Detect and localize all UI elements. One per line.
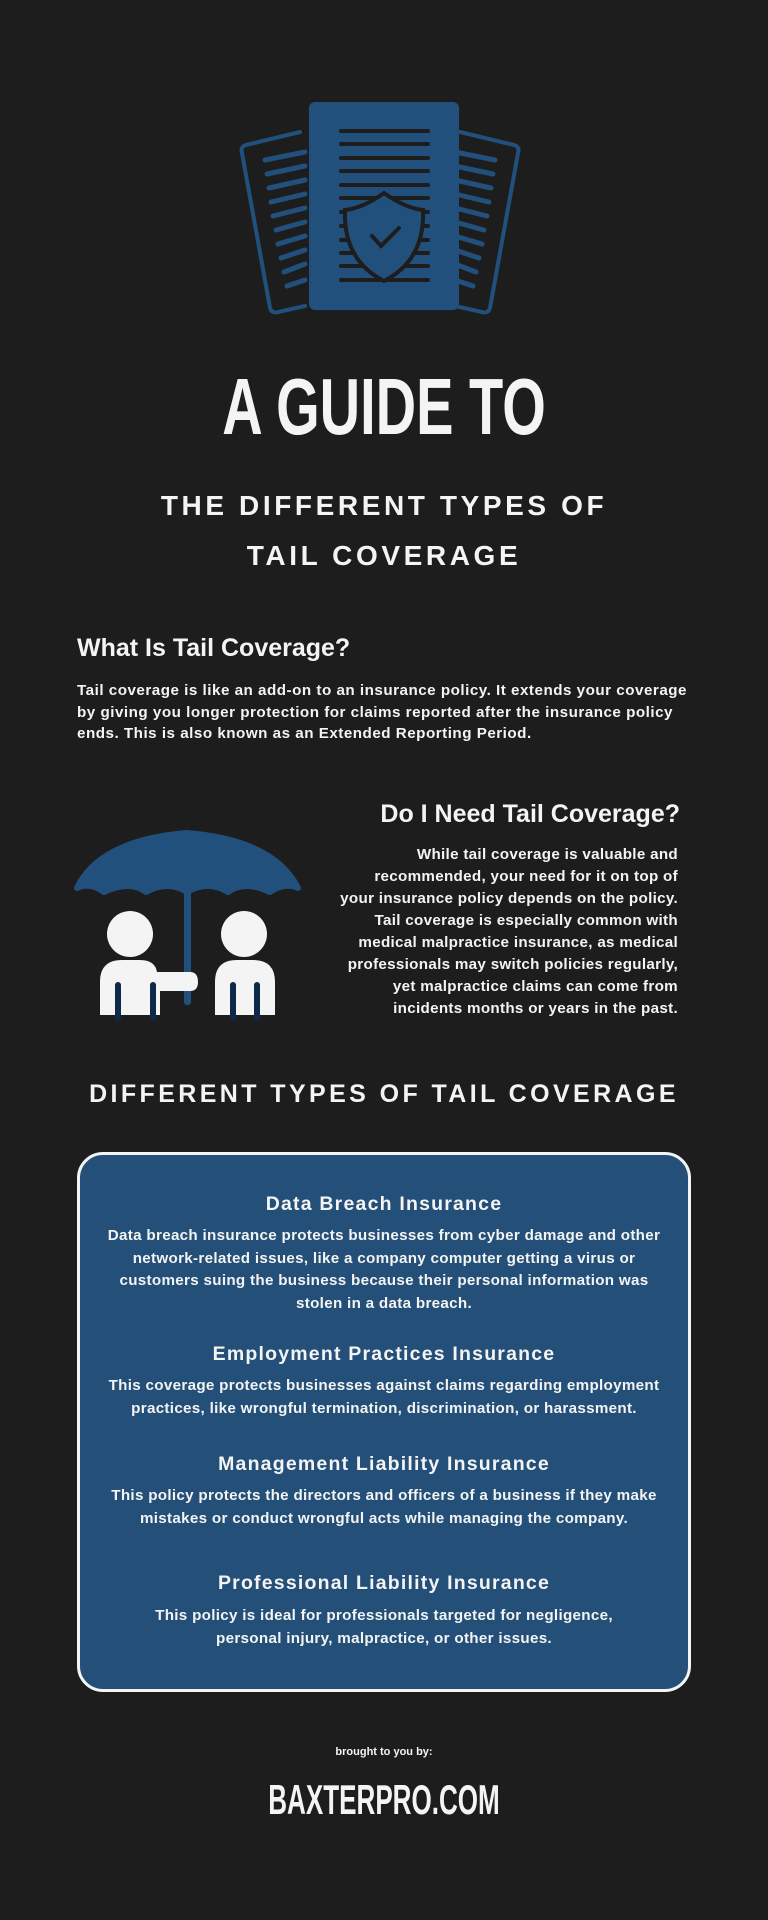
text: what is tail coverage: Tail coverage is like an add-on to an insurance policy. It extends your coverage by giving you longer protection for claims reported after the insurance policy ends. This is also known as an Extended Reporting Period.: [77, 682, 687, 742]
icon: umbrella with people: [74, 830, 301, 1021]
text: do I need tail coverage: Tail coverage is especially common with: [375, 912, 678, 929]
heading: employment practices: Employment Practices Insurance: [213, 1343, 555, 1365]
title: A GUIDE TO: [222, 362, 546, 451]
brand: BAXTERPRO.COM: [268, 1776, 500, 1823]
heading: management liability: Management Liability Insurance: [218, 1453, 550, 1475]
text: do I need tail coverage: professionals may switch policies regularly,: [348, 956, 678, 973]
text: do I need tail coverage: recommended, your need for it on top of: [374, 868, 678, 885]
heading: different types: DIFFERENT TYPES OF TAIL COVERAGE: [89, 1080, 679, 1108]
subtitle: [161, 490, 607, 571]
text: do I need tail coverage: incidents months or years in the past.: [393, 1000, 678, 1017]
subtitle: TAIL COVERAGE: [247, 540, 521, 571]
heading: do I need tail coverage: Do I Need Tail Coverage?: [380, 800, 680, 828]
subtitle: THE DIFFERENT TYPES OF: [161, 490, 607, 521]
text: do I need tail coverage: [340, 846, 678, 1017]
text: professional liability: This policy is ideal for professionals targeted for negligence, personal injury, malpractice, or other issues.: [155, 1607, 613, 1646]
text: data breach: Data breach insurance protects businesses from cyber damage and other network-related issues, like a company computer getting a virus or customers suing the business because their personal information was stolen in a data breach.: [108, 1227, 660, 1312]
heading: data breach: Data Breach Insurance: [266, 1193, 502, 1215]
credit label: brought to you by:: [335, 1746, 433, 1758]
text: do I need tail coverage: yet malpractice claims can come from: [393, 978, 678, 995]
icon: insurance documents with shield: [240, 102, 520, 314]
text: do I need tail coverage: your insurance policy depends on the policy.: [340, 890, 678, 907]
panel: types of tail coverage: [77, 1152, 691, 1692]
text: do I need tail coverage: medical malpractice insurance, as medical: [358, 934, 678, 951]
text: employment practices: This coverage protects businesses against claims regarding employment practices, like wrongful termination, discrimination, or harassment.: [109, 1377, 659, 1416]
heading: what is tail coverage: What Is Tail Coverage?: [77, 634, 350, 662]
text: do I need tail coverage: While tail coverage is valuable and: [417, 846, 678, 863]
text: management liability: This policy protects the directors and officers of a business if they make mistakes or conduct wrongful acts while managing the company.: [111, 1487, 657, 1526]
heading: professional liability: Professional Liability Insurance: [218, 1572, 550, 1594]
